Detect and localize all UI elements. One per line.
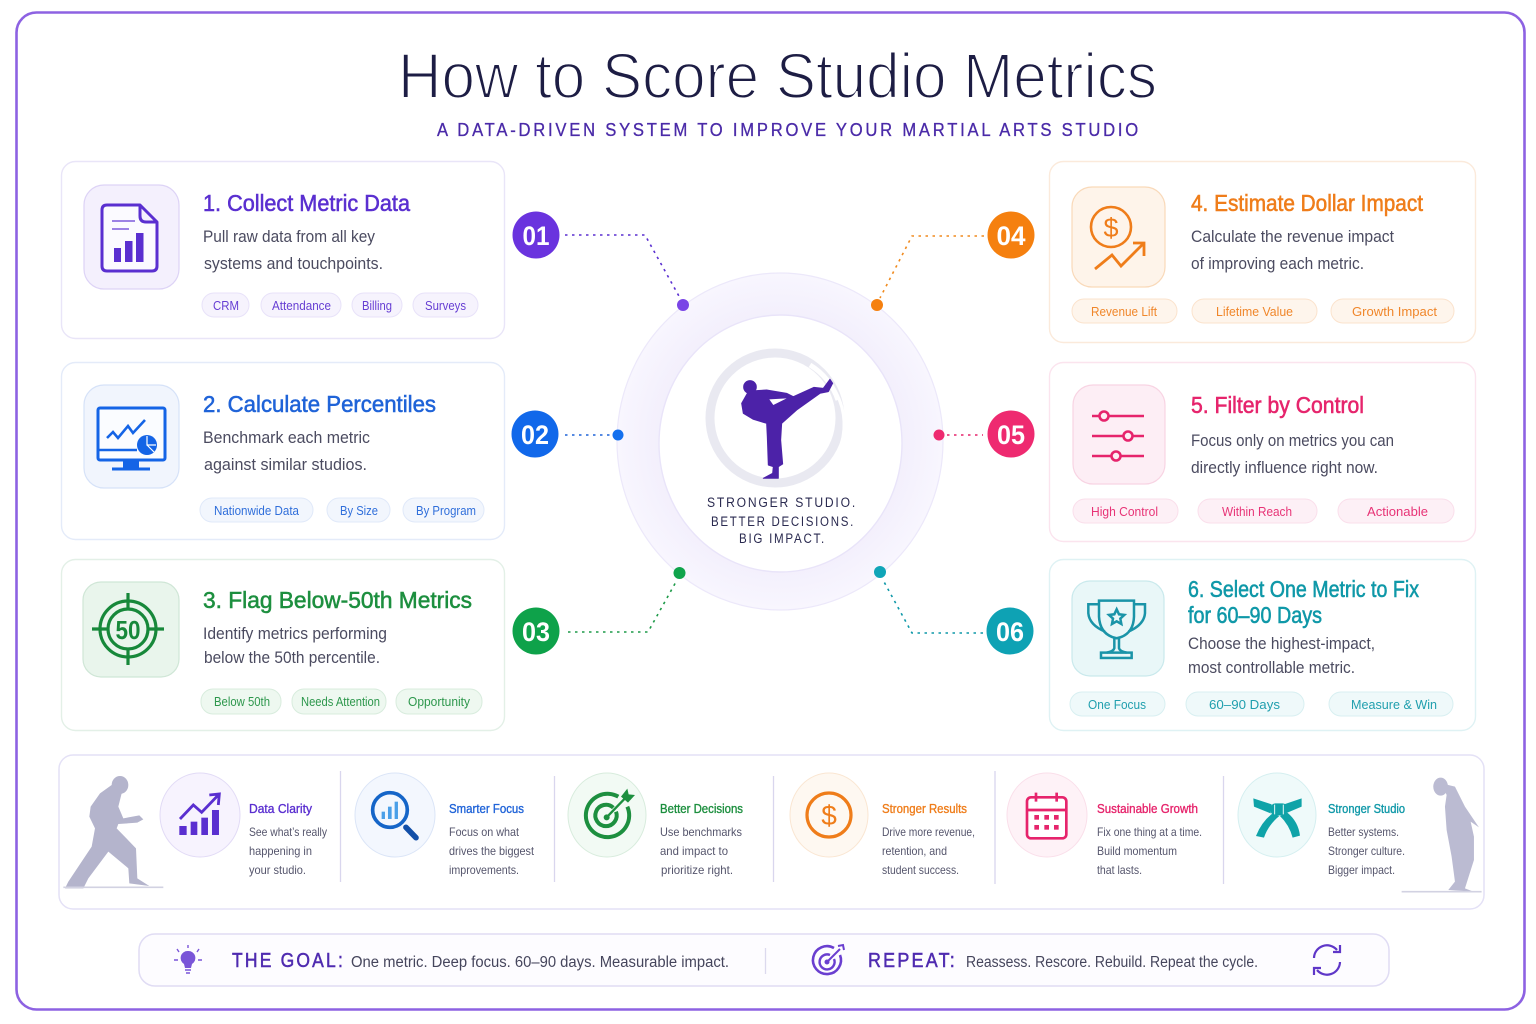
text: data clarity: your studio. xyxy=(249,863,306,877)
step 1 description xyxy=(203,228,383,273)
text: stronger studio: Better systems. xyxy=(1328,825,1399,839)
step 4 description xyxy=(1191,228,1394,273)
step 5 tags xyxy=(1073,499,1454,523)
text: data clarity: Data Clarity xyxy=(249,801,312,816)
step 3 tags xyxy=(201,689,482,714)
text: better decisions xyxy=(660,801,743,877)
text: better decisions: and impact to xyxy=(660,844,728,858)
connector 02 xyxy=(565,430,624,440)
badge 01: 01 xyxy=(522,221,550,251)
text: stronger results xyxy=(882,801,975,877)
step 4 tags xyxy=(1072,299,1454,323)
text: data clarity xyxy=(249,801,327,877)
kicking martial artist silhouette xyxy=(742,379,833,478)
connector 01 xyxy=(565,235,689,311)
text: stronger studio xyxy=(1328,801,1405,877)
text: smarter focus: drives the biggest xyxy=(449,844,535,858)
step 6 tags: Measure & Win xyxy=(1351,698,1437,712)
step 1 tags: Surveys xyxy=(425,299,466,313)
icon: target with 50 xyxy=(83,582,179,677)
badge 05 xyxy=(988,410,1034,458)
step 3 tags: Opportunity xyxy=(408,695,471,709)
repeat label: REPEAT: xyxy=(868,950,957,972)
text: sustainable growth: Sustainable Growth xyxy=(1097,801,1198,816)
badge 06: 06 xyxy=(996,617,1024,647)
icon: rising bars xyxy=(179,794,219,835)
hub tagline: BIG IMPACT. xyxy=(739,531,826,546)
text: stronger results: Drive more revenue, xyxy=(882,825,975,839)
subtitle: A DATA-DRIVEN SYSTEM TO IMPROVE YOUR MARTIAL ARTS STUDIO xyxy=(437,120,1141,140)
text: better decisions: prioritize right. xyxy=(661,863,733,877)
step 5 description: Focus only on metrics you can xyxy=(1191,432,1394,450)
icon: belt xyxy=(1253,798,1302,838)
icon: dollar coin xyxy=(807,793,851,837)
icon: target with 50: 50 xyxy=(116,615,140,645)
badge 03: 03 xyxy=(522,617,550,647)
step 2 tags xyxy=(200,498,484,522)
badge 04 xyxy=(988,212,1034,258)
icon: trophy xyxy=(1072,581,1164,676)
connector 04 xyxy=(871,236,984,311)
step 3 description: below the 50th percentile. xyxy=(204,649,380,667)
goal label: THE GOAL: xyxy=(232,950,345,972)
step 3 description xyxy=(203,625,387,667)
step 3 description: Identify metrics performing xyxy=(203,625,387,643)
goal text: One metric. Deep focus. 60–90 days. Measurable impact. xyxy=(351,954,729,971)
panel: step 3 flag below-50th metrics xyxy=(62,560,504,730)
text: data clarity: See what’s really xyxy=(249,825,327,839)
step 4 tags: Revenue Lift xyxy=(1091,305,1157,319)
icon: dollar coin: $ xyxy=(821,800,837,831)
icon: sliders xyxy=(1073,385,1165,484)
icon: monitor with chart xyxy=(84,385,179,488)
repeat text: Reassess. Rescore. Rebuild. Repeat the cycle. xyxy=(966,954,1258,971)
text: stronger results: Stronger Results xyxy=(882,801,967,816)
step 6 description: most controllable metric. xyxy=(1188,659,1355,677)
text: better decisions: Better Decisions xyxy=(660,801,743,816)
step 4 tags: Growth Impact xyxy=(1352,305,1438,319)
icon: magnifier with bars xyxy=(373,793,416,838)
text: better decisions: Use benchmarks xyxy=(660,825,742,839)
step 2 tags: Nationwide Data xyxy=(214,504,299,518)
step 1 description: systems and touchpoints. xyxy=(204,255,383,273)
text: smarter focus xyxy=(449,801,535,877)
badge 03 xyxy=(512,608,560,654)
text: stronger studio: Stronger culture. xyxy=(1328,844,1405,858)
step 5 description: directly influence right now. xyxy=(1191,459,1378,477)
step 6 tags xyxy=(1070,692,1453,716)
benefit: data clarity xyxy=(160,773,327,877)
badge 02: 02 xyxy=(521,420,549,450)
step 4 heading: 4. Estimate Dollar Impact xyxy=(1191,190,1424,216)
step 1 tags: CRM xyxy=(213,299,239,313)
step 1 tags xyxy=(202,293,478,317)
icon: dollar with growth arrow xyxy=(1072,187,1165,287)
badge 06 xyxy=(986,608,1034,654)
figure: fighter in stance xyxy=(63,776,163,888)
step 5 tags: Within Reach xyxy=(1222,505,1292,519)
step 2 description xyxy=(203,429,370,474)
step 3 tags: Below 50th xyxy=(214,695,270,709)
central hub xyxy=(617,273,943,610)
benefit: stronger studio xyxy=(1238,773,1405,877)
badge 02 xyxy=(512,410,558,458)
icon: bullseye with arrow xyxy=(586,789,635,837)
step 1 heading: 1. Collect Metric Data xyxy=(203,190,410,216)
panel: step 1 collect metric data xyxy=(62,162,504,338)
connector 03 xyxy=(568,567,686,632)
step 4 tags: Lifetime Value xyxy=(1216,305,1293,319)
icon: refresh arrows xyxy=(1314,945,1340,975)
step 2 tags: By Program xyxy=(416,504,476,518)
badge 01 xyxy=(512,212,560,258)
icon: document with bar chart xyxy=(84,185,179,289)
step 2 description: against similar studios. xyxy=(204,456,367,474)
text: stronger results: student success. xyxy=(882,863,959,877)
benefit: smarter focus xyxy=(355,773,535,877)
connector 06 xyxy=(874,566,983,633)
text: smarter focus: improvements. xyxy=(449,863,519,877)
panel: goal and repeat bar xyxy=(139,934,1389,986)
icon: dollar with growth arrow: $ xyxy=(1103,213,1119,243)
text: data clarity: happening in xyxy=(249,844,312,858)
step 6 heading: for 60–90 Days xyxy=(1188,602,1322,628)
step 2 heading: 2. Calculate Percentiles xyxy=(203,391,436,417)
step 5 description xyxy=(1191,432,1394,477)
text: smarter focus: Focus on what xyxy=(449,825,520,839)
brush ring xyxy=(710,353,844,483)
text: stronger studio: Stronger Studio xyxy=(1328,801,1405,816)
step 3 heading: 3. Flag Below-50th Metrics xyxy=(203,587,472,613)
text: sustainable growth: that lasts. xyxy=(1097,863,1142,877)
icon: calendar xyxy=(1027,793,1066,838)
step 2 tags: By Size xyxy=(340,504,378,518)
step 6 tags: 60–90 Days xyxy=(1209,698,1280,712)
title: How to Score Studio Metrics xyxy=(398,40,1157,112)
hub tagline xyxy=(707,495,857,546)
text: stronger results: retention, and xyxy=(882,844,947,858)
badge 05: 05 xyxy=(997,420,1025,450)
text: sustainable growth xyxy=(1097,801,1202,877)
text: smarter focus: Smarter Focus xyxy=(449,801,524,816)
step 6 description: Choose the highest-impact, xyxy=(1188,635,1375,653)
text: stronger studio: Bigger impact. xyxy=(1328,863,1395,877)
panel: step 5 filter by control xyxy=(1050,362,1476,542)
step 3 tags: Needs Attention xyxy=(301,695,380,709)
icon: light bulb xyxy=(174,945,202,973)
icon: target xyxy=(813,945,844,974)
divider lines xyxy=(340,771,1224,884)
step 6 heading: 6. Select One Metric to Fix xyxy=(1188,576,1419,602)
benefit: better decisions xyxy=(568,773,743,877)
step 1 tags: Attendance xyxy=(272,299,331,313)
step 6 tags: One Focus xyxy=(1088,698,1146,712)
badge 04: 04 xyxy=(996,221,1026,251)
text: sustainable growth: Fix one thing at a time. xyxy=(1097,825,1202,839)
hub tagline: BETTER DECISIONS. xyxy=(711,514,855,529)
step 6 heading xyxy=(1188,576,1419,628)
text: sustainable growth: Build momentum xyxy=(1097,844,1177,858)
step 5 heading: 5. Filter by Control xyxy=(1191,392,1364,418)
connector 05 xyxy=(934,430,983,440)
step 4 description: Calculate the revenue impact xyxy=(1191,228,1394,246)
panel: step 4 estimate dollar impact xyxy=(1050,162,1476,342)
benefit: sustainable growth xyxy=(1007,773,1202,877)
benefit: stronger results xyxy=(790,773,975,877)
panel: step 6 select one metric to fix xyxy=(1050,560,1476,730)
step 5 tags: High Control xyxy=(1091,505,1158,519)
step 1 description: Pull raw data from all key xyxy=(203,228,376,246)
step 5 tags: Actionable xyxy=(1367,505,1428,519)
step 6 description xyxy=(1188,635,1375,677)
hub tagline: STRONGER STUDIO. xyxy=(707,495,857,510)
figure: bowing fighter xyxy=(1402,778,1482,892)
step 1 tags: Billing xyxy=(362,299,392,313)
step 4 description: of improving each metric. xyxy=(1191,255,1364,273)
panel: step 2 calculate percentiles xyxy=(62,362,504,540)
step 2 description: Benchmark each metric xyxy=(203,429,370,447)
panel: benefits strip xyxy=(59,755,1484,909)
